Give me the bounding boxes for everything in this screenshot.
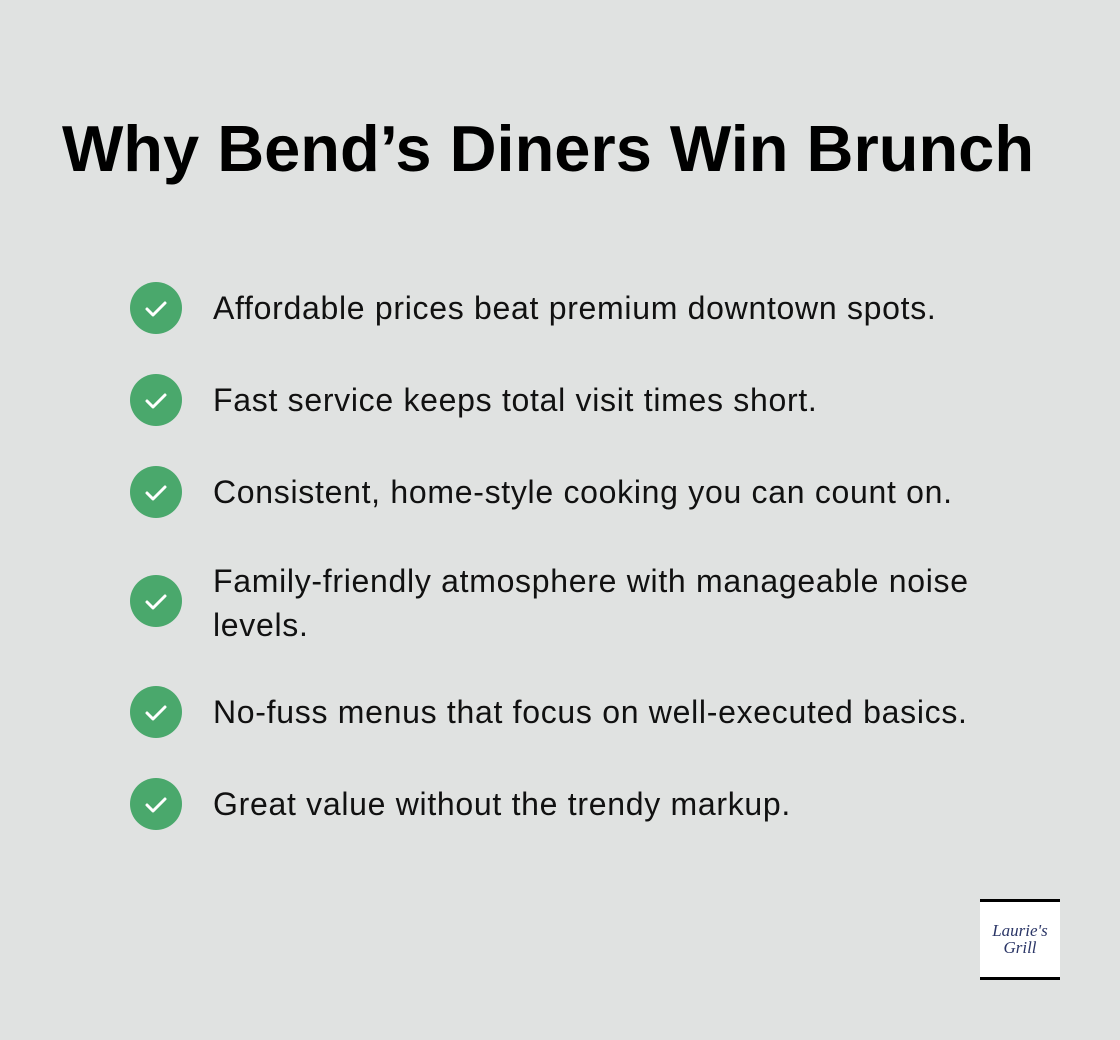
item 3: Consistent, home-style cooking you can count on. — [213, 474, 953, 510]
item 5: No-fuss menus that focus on well-executed basics. — [213, 694, 968, 730]
logo: Grill — [1003, 938, 1037, 957]
item 3 — [130, 466, 953, 518]
item 4: Family-friendly atmosphere with manageable noise levels. — [213, 563, 969, 643]
item 2: Fast service keeps total visit times short. — [213, 382, 818, 418]
logo: Laurie's — [992, 921, 1048, 940]
item 1 — [130, 282, 937, 334]
title: Why Bend’s Diners Win Brunch — [62, 112, 1034, 185]
item 6 — [130, 778, 791, 830]
logo — [980, 899, 1060, 980]
item 2 — [130, 374, 818, 426]
item 1: Affordable prices beat premium downtown spots. — [213, 290, 937, 326]
item 5 — [130, 686, 968, 738]
item 6: Great value without the trendy markup. — [213, 786, 791, 822]
